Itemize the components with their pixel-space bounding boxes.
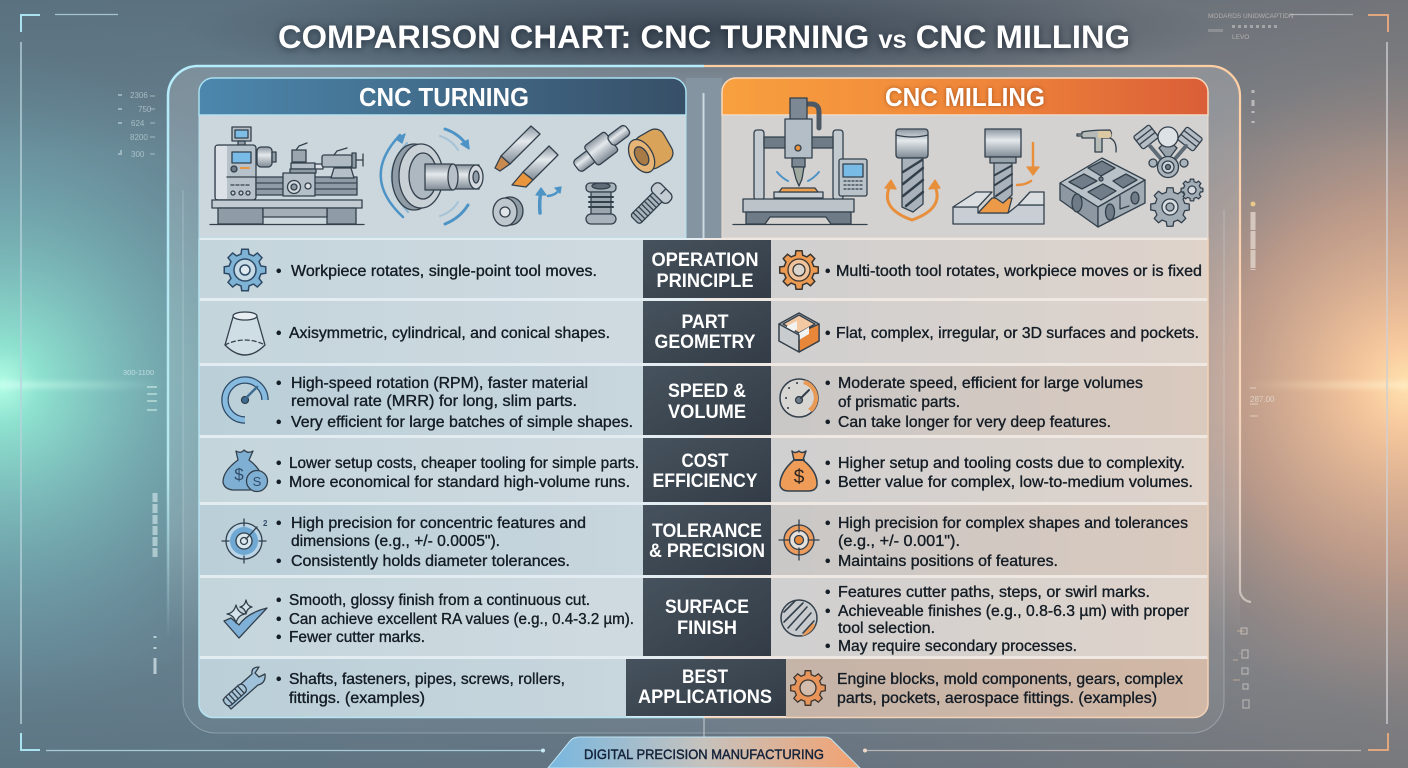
icon: finish check with sparkles <box>224 600 267 638</box>
row: tolerance and precision: • <box>825 553 830 570</box>
icon: wrench and bolt <box>222 667 265 709</box>
illustration: lathe machine <box>210 127 364 224</box>
icon: milling target <box>779 520 819 560</box>
panel: CNC milling card <box>722 78 1208 238</box>
row: cost efficiency: Higher setup and tooling costs due to complexity. <box>838 455 1185 472</box>
illustration: turned parts <box>569 119 677 228</box>
row: surface finish: Can achieve excellent RA values (e.g., 0.4-3.2 µm). <box>289 611 634 628</box>
row: cost efficiency: • <box>825 455 830 472</box>
row: speed and volume: VOLUME <box>668 401 746 423</box>
row: surface finish: Smooth, glossy finish from a continuous cut. <box>289 592 590 609</box>
row: operation principle: PRINCIPLE <box>656 270 754 292</box>
row: part geometry: • <box>825 325 830 342</box>
HUD readouts right <box>1208 13 1294 708</box>
row: operation principle: • <box>825 263 830 280</box>
row: tolerance and precision: • <box>276 553 281 570</box>
row: surface finish: • <box>825 584 830 601</box>
card edges <box>199 238 1208 718</box>
row: tolerance and precision: (e.g., +/- 0.001"). <box>838 533 960 550</box>
row: speed and volume: of prismatic parts. <box>838 394 960 411</box>
row: speed and volume: • <box>276 414 281 431</box>
footer tab: DIGITAL PRECISION MANUFACTURING <box>584 746 824 762</box>
row: surface finish: Achieveable finishes (e.g., 0.8-6.3 µm) with proper <box>838 603 1189 620</box>
illustration: milled parts <box>1060 125 1203 227</box>
icon: turning gear <box>224 249 266 291</box>
row: cost efficiency: More economical for standard high-volume runs. <box>289 474 630 491</box>
row: part geometry: GEOMETRY <box>654 331 756 353</box>
row: speed and volume: Very efficient for large batches of simple shapes. <box>291 414 633 431</box>
row: cost efficiency: Lower setup costs, cheaper tooling for simple parts. <box>289 455 639 472</box>
HUD readouts left <box>118 91 157 674</box>
icon: milling gauge <box>780 379 818 417</box>
row: cost efficiency: EFFICIENCY <box>652 470 758 492</box>
row: surface finish: SURFACE <box>665 596 749 618</box>
row: tolerance and precision: • <box>825 515 830 532</box>
milling header <box>722 78 1208 115</box>
milling header: CNC MILLING <box>885 82 1045 112</box>
row: tolerance and precision: & PRECISION <box>649 540 765 562</box>
illustration: milling machine <box>733 98 867 224</box>
row: cost efficiency <box>199 438 1208 502</box>
icon: turning target <box>222 519 268 563</box>
row: surface finish: Features cutter paths, steps, or swirl marks. <box>838 584 1150 601</box>
row: operation principle: • <box>276 263 281 280</box>
row: speed and volume: • <box>825 414 830 431</box>
row: speed and volume: Moderate speed, efficient for large volumes <box>838 375 1143 392</box>
row: speed and volume: SPEED & <box>668 380 746 402</box>
row: surface finish: • <box>276 629 281 646</box>
icon: turning gauge <box>225 380 265 420</box>
row: speed and volume: removal rate (MRR) for long, slim parts. <box>291 393 577 410</box>
row: tolerance and precision: TOLERANCE <box>652 520 762 542</box>
row: part geometry: Flat, complex, irregular, or 3D surfaces and pockets. <box>836 325 1199 342</box>
row: tolerance and precision: High precision for complex shapes and tolerances <box>838 515 1188 532</box>
row: best applications: Shafts, fasteners, pipes, screws, rollers, <box>289 671 565 688</box>
row: part geometry: Axisymmetric, cylindrical, and conical shapes. <box>289 325 610 342</box>
row: operation principle: Workpiece rotates, single-point tool moves. <box>291 263 597 280</box>
row: surface finish <box>199 578 1208 656</box>
HUD readouts left: 750 <box>138 105 152 114</box>
HUD readouts right: MODARDS UNIDWCAPTIDN <box>1208 13 1294 20</box>
icon: milling gear <box>780 251 818 289</box>
HUD readouts left: 8200 <box>130 133 148 142</box>
row: surface finish: • <box>276 611 281 628</box>
illustration: end mill <box>885 129 940 220</box>
row: best applications: Engine blocks, mold components, gears, complex <box>837 671 1183 688</box>
row: operation principle: Multi-tooth tool rotates, workpiece moves or is fixed <box>836 263 1202 280</box>
HUD readouts left: 2306 <box>130 91 148 100</box>
icon: striped surface sphere <box>781 600 817 636</box>
row: best applications: • <box>276 671 281 688</box>
illustration: rotating workpiece <box>381 129 483 224</box>
row: tolerance and precision <box>199 505 1208 575</box>
HUD readouts left: 300 <box>131 150 145 159</box>
outer glass panel <box>168 66 1251 733</box>
row: cost efficiency: COST <box>682 450 729 472</box>
row: cost efficiency: Better value for complex, low-to-medium volumes. <box>838 474 1193 491</box>
icon: application gear <box>791 671 825 705</box>
row: tolerance and precision: • <box>276 515 281 532</box>
icon: pocket cube <box>779 313 819 352</box>
row: tolerance and precision: Maintains positions of features. <box>838 553 1058 570</box>
row: best applications: BEST <box>682 666 728 688</box>
icon: turning money bags: $ <box>234 465 244 484</box>
icon: turning target: 2 <box>263 519 268 528</box>
row: best applications: parts, pockets, aerospace fittings. (examples) <box>837 690 1157 707</box>
turning header: CNC TURNING <box>359 82 529 112</box>
row: surface finish: • <box>276 592 281 609</box>
row: surface finish: FINISH <box>677 617 737 639</box>
row: best applications: APPLICATIONS <box>638 686 772 708</box>
illustration: cutting into block <box>953 129 1044 224</box>
turning header <box>199 78 686 115</box>
icon: milling money bag: $ <box>794 467 805 488</box>
row: surface finish: • <box>825 638 830 655</box>
row: surface finish: Fewer cutter marks. <box>289 629 425 646</box>
row: speed and volume: • <box>825 375 830 392</box>
icon: cone <box>225 312 265 355</box>
row: part geometry <box>199 301 1208 363</box>
row: tolerance and precision: High precision for concentric features and <box>291 515 586 532</box>
row: surface finish: tool selection. <box>838 620 935 637</box>
row: best applications: fittings. (examples) <box>289 690 425 707</box>
row: surface finish: May require secondary processes. <box>838 638 1077 655</box>
row: speed and volume: • <box>276 375 281 392</box>
row: tolerance and precision: dimensions (e.g., +/- 0.0005"). <box>291 533 500 550</box>
row: operation principle: OPERATION <box>652 249 758 271</box>
row: cost efficiency: • <box>276 455 281 472</box>
HUD readouts right: 287.00 <box>1250 395 1275 404</box>
title: COMPARISON CHART: CNC TURNING vs CNC MILLING <box>278 19 1130 55</box>
row: cost efficiency: • <box>276 474 281 491</box>
row: operation principle <box>199 240 1208 298</box>
row: speed and volume: High-speed rotation (RPM), faster material <box>291 375 588 392</box>
icon: milling money bag <box>780 451 817 491</box>
row: best applications <box>199 659 1208 717</box>
row: surface finish: • <box>825 603 830 620</box>
row: speed and volume: Can take longer for very deep features. <box>838 414 1111 431</box>
row: speed and volume <box>199 366 1208 435</box>
HUD readouts left: 300-1100 <box>123 368 154 377</box>
illustration: cutting tools <box>493 126 561 226</box>
footer tab <box>548 718 860 768</box>
icon: turning money bags: S <box>253 474 262 489</box>
row: tolerance and precision: Consistently holds diameter tolerances. <box>291 553 570 570</box>
HUD readouts left: 624 <box>131 119 145 128</box>
panel: center gap <box>686 78 722 238</box>
HUD readouts right: LEVO <box>1232 34 1249 41</box>
row: cost efficiency: • <box>825 474 830 491</box>
icon: turning money bags <box>223 450 268 492</box>
table backing <box>199 238 1208 717</box>
panel: CNC turning card <box>199 78 686 238</box>
row: part geometry: PART <box>682 311 729 333</box>
row: part geometry: • <box>276 325 281 342</box>
